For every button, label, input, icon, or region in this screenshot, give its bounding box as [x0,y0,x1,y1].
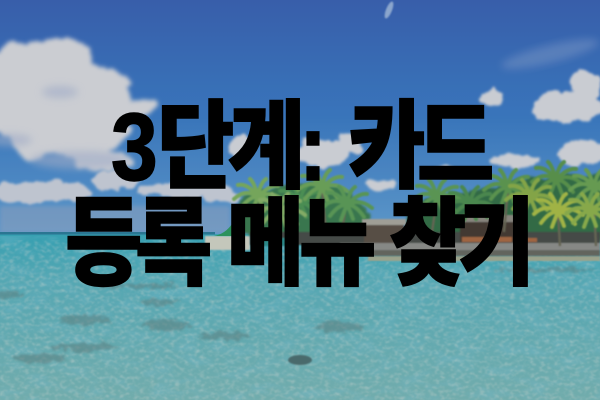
clouds: wisp at the top [383,1,395,19]
background: sky [0,0,600,236]
horizon haze [0,206,230,233]
horizon line [0,232,215,234]
clouds: centre and right clouds [230,70,600,191]
clouds: low bank at the left horizon [0,170,242,203]
island: beach and shoreline [205,224,600,261]
sea [0,234,600,400]
title [65,94,535,298]
island: resort huts and pier [250,215,600,256]
clouds: thin cirrus upper right [499,33,600,75]
rock [288,355,312,365]
clouds: left cloud shading [0,86,130,169]
title line 1: 3단계: 카드 [111,94,494,201]
island: tree mass [238,175,600,240]
island: palm trees [234,162,600,246]
reef shadows [0,268,595,362]
sea texture [0,236,600,400]
clouds: large left cloud [0,38,155,170]
title line 2: 등록 메뉴찾기 [65,191,535,298]
